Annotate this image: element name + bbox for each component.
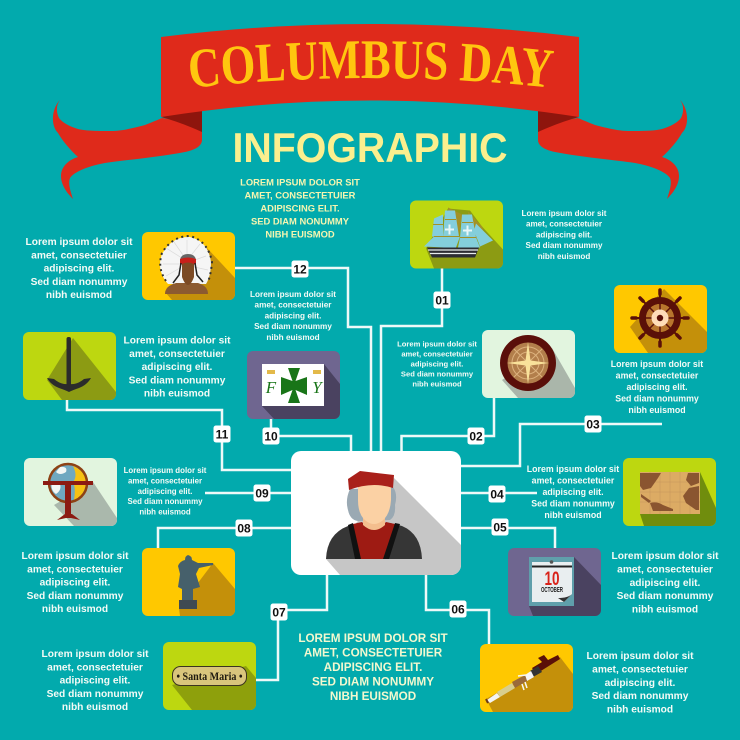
panel: globe icon: [24, 458, 117, 526]
text: peace pipe: amet, consectetuier: [592, 664, 688, 675]
date: 10: [544, 569, 560, 590]
shadow: [426, 208, 503, 268]
text: Santa Maria: adipiscing elit.: [60, 676, 131, 687]
text: anchor: Lorem ipsum dolor sit: [124, 336, 231, 346]
text: map: Lorem ipsum dolor sit: [527, 464, 619, 474]
banner ribbon: [53, 24, 687, 199]
center panel: Columbus portrait: [291, 451, 461, 575]
text: ship wheel: Lorem ipsum dolor sit: [611, 359, 703, 369]
text: compass: amet, consectetuier: [401, 350, 473, 358]
neck: [363, 515, 385, 530]
shadow: [47, 338, 116, 400]
shadow: [172, 666, 256, 710]
text: headdress: amet, consectetuier: [31, 250, 127, 261]
text: headdress: Lorem ipsum dolor sit: [26, 237, 133, 248]
hub: [652, 310, 668, 326]
white wrap: [525, 671, 534, 681]
number 08: 08: [237, 522, 251, 536]
feather tips: [160, 236, 212, 282]
text: Santa Maria: amet, consectetuier: [47, 662, 143, 673]
text: peace pipe: adipiscing elit.: [605, 678, 676, 689]
bottom text block: LOREM IPSUM DOLOR SIT: [298, 632, 449, 645]
horizontal stand: [43, 481, 93, 485]
text: anchor: nibh euismod: [144, 389, 210, 400]
number 03: 03: [586, 418, 600, 432]
text: calendar: nibh euismod: [632, 605, 698, 616]
text: globe: adipiscing elit.: [138, 487, 192, 496]
heading: infographic: INFOGRAPHIC: [232, 124, 508, 171]
text: ship: nibh euismod: [538, 252, 590, 261]
sail crosses: [445, 224, 472, 236]
text: ship wheel: nibh euismod: [628, 405, 686, 415]
rear brown sails: [448, 208, 484, 240]
panel: calendar icon: [508, 548, 601, 616]
number 07: 07: [272, 606, 286, 620]
text: map: amet, consectetuier: [532, 476, 615, 486]
pipe band: [530, 666, 542, 677]
text: peace pipe: Sed diam nonummy: [592, 691, 689, 702]
text: statue: amet, consectetuier: [27, 564, 123, 575]
number 02: 02: [469, 430, 483, 444]
spoke knobs: [632, 290, 688, 346]
connector 03: [461, 424, 662, 466]
number 11: [214, 426, 230, 442]
right crown: [313, 370, 321, 374]
anchor arms: [47, 378, 91, 392]
connector 02: [402, 397, 494, 451]
text: headdress: nibh euismod: [46, 290, 112, 301]
text: statue: nibh euismod: [42, 604, 108, 615]
number 07: [270, 604, 288, 620]
shadow: [640, 472, 716, 526]
text: Santa Maria: Lorem ipsum dolor sit: [42, 649, 149, 660]
panel: ship icon: [410, 200, 503, 268]
face: [182, 262, 194, 285]
grey hair: [347, 487, 396, 521]
connector 09: [205, 492, 291, 494]
compass star: [507, 342, 549, 384]
number 11: 11: [216, 428, 229, 442]
text: compass: adipiscing elit.: [411, 360, 463, 368]
face: [358, 484, 391, 524]
number 03: [584, 416, 602, 432]
bottom text block: NIBH EUISMOD: [330, 690, 416, 703]
connector 11: [67, 400, 291, 470]
number 10: [262, 428, 280, 444]
feathers: [160, 237, 211, 284]
green cross: [281, 368, 307, 403]
hull: [427, 248, 479, 258]
title: Columbus Day: COLUMBUS DAY: [190, 41, 554, 87]
shadow: [165, 248, 235, 300]
text: Santa Maria: nibh euismod: [62, 702, 128, 713]
text: calendar: Sed diam nonummy: [617, 591, 714, 602]
text: calendar: amet, consectetuier: [617, 564, 713, 575]
top text block: AMET, CONSECTETUIER: [245, 190, 356, 200]
connector 05: [461, 528, 555, 548]
stem: [65, 483, 71, 516]
connector 08: [158, 528, 291, 548]
connector 01: [381, 268, 442, 451]
number 04: [488, 486, 506, 502]
text: compass: nibh euismod: [412, 380, 462, 388]
pipe bowl: [532, 655, 560, 674]
text: anchor: adipiscing elit.: [142, 362, 213, 373]
number 05: [492, 518, 508, 536]
number 04: 04: [490, 488, 504, 502]
month: OCTOBER: [541, 585, 563, 594]
connector 10: [271, 418, 351, 451]
bottom text block: ADIPISCING ELIT.: [324, 661, 422, 674]
letter F: F: [265, 378, 277, 397]
brown stem: [512, 675, 527, 688]
top text block: LOREM IPSUM DOLOR SIT: [240, 176, 360, 188]
shadow: [502, 348, 575, 398]
statue figure: [178, 555, 213, 600]
panel: statue icon: [142, 548, 235, 616]
panel: ship wheel icon: [614, 285, 707, 353]
page curl: [558, 594, 572, 602]
bottom text block: SED DIAM NONUMMY: [312, 676, 434, 688]
bottom text block: AMET, CONSECTETUIER: [304, 646, 443, 660]
text: globe: Lorem ipsum dolor sit: [124, 466, 207, 475]
panel: peace pipe icon: [480, 644, 573, 712]
left ribbon tail: [53, 100, 202, 199]
panel: compass icon: [482, 330, 575, 398]
number 01: [434, 292, 450, 308]
text: globe: nibh euismod: [139, 508, 191, 517]
band cap: [180, 254, 196, 259]
pedestal: [179, 600, 197, 609]
hair: [173, 263, 203, 283]
number 12: 12: [293, 262, 307, 276]
text: peace pipe: nibh euismod: [607, 705, 673, 716]
connector 04: [461, 492, 537, 494]
spokes: [638, 296, 682, 340]
text: flag: Sed diam nonummy: [254, 322, 332, 331]
base: [57, 514, 80, 520]
top text block: NIBH EUISMOD: [265, 228, 335, 240]
number 01: 01: [435, 294, 449, 308]
name plate: [172, 666, 246, 686]
text: globe: Sed diam nonummy: [128, 497, 203, 506]
letter Y: Y: [312, 378, 323, 397]
text: headdress: Sed diam nonummy: [31, 277, 128, 288]
hub interior: [646, 304, 674, 332]
top text block: ADIPISCING ELIT.: [260, 202, 340, 214]
number 06: [450, 600, 466, 618]
portrait long shadow: [326, 478, 461, 575]
shadow: [262, 364, 340, 419]
text: Santa Maria: Sed diam nonummy: [47, 689, 144, 700]
left crown: [267, 370, 275, 374]
coat straps: [348, 523, 400, 559]
feather lines: [163, 240, 208, 276]
map grid: [640, 472, 700, 514]
sail bands: [433, 220, 476, 238]
text: statue: Lorem ipsum dolor sit: [22, 551, 129, 562]
connector 12: [234, 268, 371, 451]
red hat: [348, 471, 394, 490]
text: statue: Sed diam nonummy: [27, 591, 124, 602]
rim: [642, 300, 678, 336]
tan stem: [497, 683, 515, 697]
text: ship: Sed diam nonummy: [526, 241, 603, 250]
shoulders: [165, 283, 208, 294]
shadow: [486, 657, 573, 712]
text: map: adipiscing elit.: [542, 487, 604, 497]
panel: map icon: [623, 458, 716, 526]
text: map: Sed diam nonummy: [531, 498, 615, 508]
parchment: [640, 472, 700, 514]
text: flag: Lorem ipsum dolor sit: [250, 290, 336, 299]
south america: [650, 502, 673, 511]
left ribbon fold: [161, 108, 202, 132]
connector 06: [426, 575, 489, 644]
shadow: [54, 482, 117, 526]
number 10: 10: [264, 430, 278, 444]
panel: headdress icon: [142, 232, 235, 300]
text: calendar: adipiscing elit.: [630, 578, 701, 589]
panel: flag icon: [247, 351, 340, 419]
panel: anchor icon: [23, 332, 116, 400]
anchor shaft: [66, 337, 71, 388]
right ribbon tail: [538, 100, 687, 199]
name text: • Santa Maria •: [176, 671, 242, 683]
text: headdress: adipiscing elit.: [44, 264, 115, 275]
calendar frame: [529, 557, 574, 606]
text: globe: amet, consectetuier: [128, 476, 202, 485]
text: ship wheel: Sed diam nonummy: [615, 394, 699, 404]
number 05: 05: [493, 520, 507, 534]
white land: [52, 467, 66, 494]
text: calendar: Lorem ipsum dolor sit: [612, 551, 719, 562]
red shirt: [353, 522, 395, 559]
shadow: [179, 563, 235, 616]
main ribbon band: [161, 24, 579, 117]
central america: [641, 494, 651, 503]
text: compass: Lorem ipsum dolor sit: [397, 340, 477, 348]
text: anchor: Sed diam nonummy: [129, 375, 226, 386]
africa: [683, 486, 699, 510]
right ribbon fold: [538, 108, 579, 132]
shadow: [529, 557, 601, 616]
globe sphere: [50, 465, 86, 501]
binding: [532, 566, 572, 568]
text: ship: amet, consectetuier: [526, 220, 603, 229]
text: flag: adipiscing elit.: [265, 311, 321, 320]
europe: [686, 473, 699, 486]
globe ring: [49, 464, 87, 502]
text: ship: Lorem ipsum dolor sit: [522, 209, 607, 218]
text: ship: adipiscing elit.: [536, 230, 592, 239]
top text block: SED DIAM NONUMMY: [251, 216, 350, 226]
text: map: nibh euismod: [544, 510, 602, 520]
sails: [424, 210, 493, 248]
flag field: [262, 364, 324, 406]
feather fringe: [518, 675, 527, 690]
number 06: 06: [451, 602, 465, 616]
text: statue: adipiscing elit.: [40, 578, 111, 589]
compass case: [500, 335, 556, 391]
text: ship wheel: adipiscing elit.: [626, 382, 688, 392]
number 08: [236, 520, 252, 536]
shadow: [630, 289, 707, 353]
number 02: [468, 428, 484, 444]
text: flag: nibh euismod: [266, 333, 320, 342]
coat: [326, 523, 422, 559]
yellow land: [73, 466, 86, 500]
north america: [640, 473, 661, 490]
text: anchor: amet, consectetuier: [129, 349, 225, 360]
connector 07: [256, 575, 327, 680]
text: ship wheel: amet, consectetuier: [616, 370, 699, 380]
number 12: [292, 260, 308, 278]
panel: Santa Maria icon: [163, 642, 256, 710]
compass dial: [508, 342, 548, 384]
text: flag: amet, consectetuier: [255, 301, 332, 310]
number 09: 09: [255, 486, 269, 500]
text: compass: Sed diam nonummy: [401, 370, 474, 378]
calendar page: [532, 562, 572, 602]
number 09: [254, 484, 270, 502]
pipe tip: [487, 693, 500, 703]
text: peace pipe: Lorem ipsum dolor sit: [587, 651, 694, 662]
